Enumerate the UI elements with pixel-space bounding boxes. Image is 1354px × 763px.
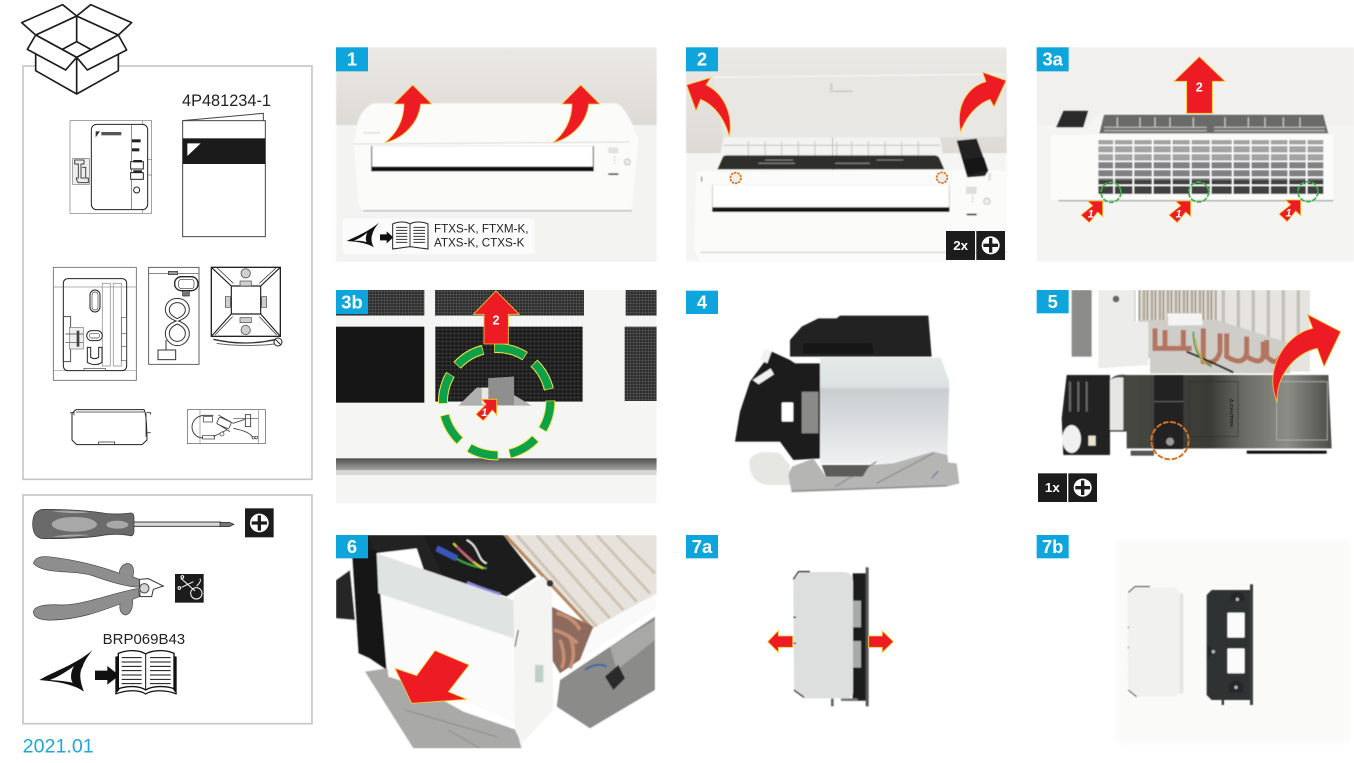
arrow: up 2: 2 [1196,81,1203,95]
step badge [336,47,368,71]
marker: right screw [937,172,947,183]
panel: step 3b [336,290,657,503]
arrow: press 1 centre [1169,201,1191,223]
marker: screw circle [1151,422,1189,459]
part: connector cover [70,410,151,445]
photo: side view of unit [735,316,959,492]
step badge [1037,290,1069,313]
arrow: press 1 centre: 1 [1176,208,1182,220]
panel: step 3a [1037,47,1354,262]
panel: box contents [22,5,312,479]
arrow: press 1 left [1081,201,1103,223]
photo: air conditioner with lid open [686,47,1007,262]
compatible model names: ATXS-K, CTXS-K [434,237,525,250]
step badge [1037,47,1069,71]
arrow: press 1 left: 1 [1088,208,1094,220]
screw count badge: 2x [953,238,969,253]
photo: air conditioner closed [336,47,657,262]
arrow: up 2 [473,291,519,344]
arrow: swing right [959,72,1006,132]
arrow: swing cover [1273,314,1341,402]
icon: phillips bit badge [245,508,274,537]
part number: 4P481234-1 [182,92,271,110]
part: manual booklet [183,113,265,237]
panel: tools [23,495,312,758]
panel: step 7a [686,535,893,706]
arrow: pull right [869,631,893,652]
part: adhesive mount with tie [211,267,282,346]
part: thermistor cable [149,267,199,364]
part: wireless adapter [70,121,152,213]
photo: open control box: ⚠ CAUTION [1228,398,1234,427]
marker: centre clip [1189,182,1209,202]
compatible model names: FTXS-K, FTXM-K, [434,223,529,236]
step badge [686,535,718,558]
photo: clip close-up [336,290,657,503]
screw count badge: 1x [1045,480,1060,495]
photo: box being separated [793,567,869,706]
photo: sliding out the control box [336,535,657,748]
step badge [686,47,718,71]
arrow: up 2: 2 [492,313,500,327]
icon: side cutters [33,557,163,620]
arrow: pull left [768,631,793,652]
arrow: swing left [687,78,730,137]
step badge: 7a [692,536,713,557]
arrow: press 1 right [1279,200,1301,222]
icon: open cardboard box [22,5,132,94]
photo: separated cover and housing [1117,540,1350,743]
marker: right clip [1298,182,1318,202]
panel: step 1 [336,47,657,262]
panel: step 5 [1037,290,1353,503]
step badge: 5 [1048,291,1058,312]
step badge [336,290,368,314]
arrow: lift right [553,85,600,143]
arrow: slide out [395,651,469,703]
panel: step 4 [686,291,959,492]
step badge [1037,535,1069,558]
box contents frame [23,66,312,479]
icon: eye and manual [347,222,428,249]
icon: screwdriver [33,509,234,539]
arrow: press 1: 1 [481,407,487,419]
step badge: 4 [697,292,708,313]
arrow: up 2 [1174,57,1225,113]
photo: front grille with filter [1037,47,1354,262]
marker: left clip [1101,182,1121,202]
part: mounting plate [53,267,136,380]
part: wire harness [187,410,265,444]
arrow: lift left [385,85,432,143]
step badge: 7b [1042,536,1063,557]
photo: open control box [1060,290,1332,456]
screw count badge [946,231,1005,260]
model reference box [343,218,535,254]
arrow: press 1 right: 1 [1286,207,1292,219]
manual reference code: BRP069B43 [103,631,185,648]
step badge: 2 [697,49,707,70]
marker: left screw [730,173,741,183]
panel: step 7b [1037,535,1350,743]
step badge [686,291,718,314]
step badge: 3b [341,291,363,312]
marker: dashed green circle [443,348,550,455]
step badge: 6 [347,536,357,557]
panel: step 6 [336,535,657,748]
step badge: 1 [347,49,357,70]
step badge [336,535,368,558]
icon: cut cable badge [175,574,204,603]
arrow: press 1 [476,399,497,421]
icon: eye looking at manual [39,650,177,694]
date: 2021.01 [23,736,94,758]
screw count badge [1038,473,1097,502]
tools frame [23,495,312,724]
step badge: 3a [1042,49,1064,70]
panel: step 2 [686,47,1007,262]
